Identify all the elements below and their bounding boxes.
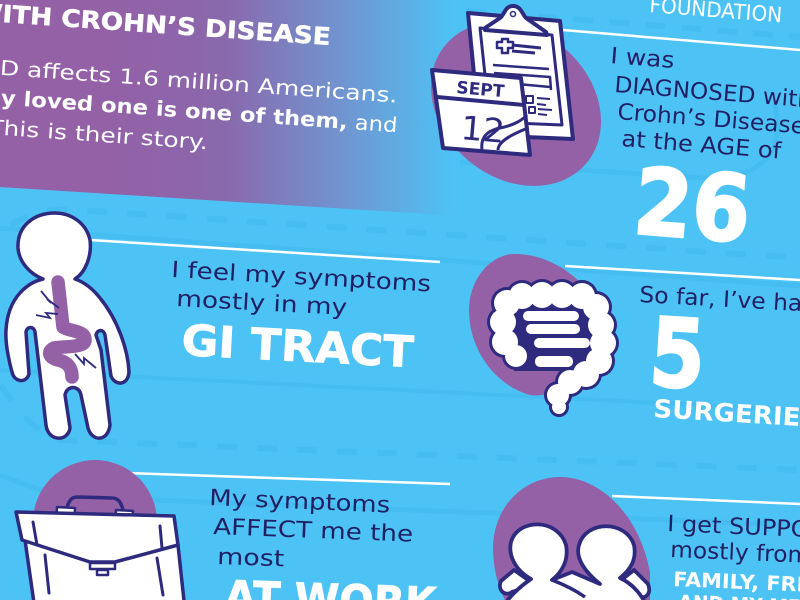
support text <box>667 511 800 569</box>
icon: clipboard and calendar <box>432 6 573 155</box>
icon: briefcase <box>16 497 185 600</box>
panel: surgeries <box>469 254 800 433</box>
panel: work <box>16 460 439 600</box>
panel: diagnosed <box>398 0 800 264</box>
diagnosis text <box>610 43 800 165</box>
calendar date: 12 <box>459 108 507 151</box>
purple blob 2 <box>469 254 590 395</box>
purple blob 3 <box>33 460 157 584</box>
diagnosis text: at the AGE of <box>621 126 783 165</box>
age number: 26 <box>630 148 754 264</box>
diagnosis text: I was <box>610 43 675 74</box>
symptoms text: mostly in my <box>176 286 348 321</box>
work text: AFFECT me the <box>213 514 414 548</box>
calendar month: SEPT <box>456 78 506 102</box>
diagnosis text: Crohn’s Disease <box>617 99 800 140</box>
symptoms text: I feel my symptoms <box>171 257 432 298</box>
panel: support <box>493 477 800 600</box>
symptoms text <box>171 257 432 321</box>
icon: human body with GI tract <box>6 213 129 438</box>
surgeries number: 5 <box>647 298 708 411</box>
purple blob 4 <box>493 477 650 600</box>
purple blob 1 <box>398 0 634 220</box>
work text: most <box>217 544 285 572</box>
GI tract label: GI TRACT <box>180 316 415 378</box>
icon: intestines <box>487 279 619 417</box>
banner body text <box>0 54 398 154</box>
panel: symptoms location <box>6 213 432 438</box>
work text: My symptoms <box>209 485 391 519</box>
work text <box>209 485 414 572</box>
purple gradient banner <box>0 0 460 216</box>
icon: two people embracing <box>495 524 652 600</box>
